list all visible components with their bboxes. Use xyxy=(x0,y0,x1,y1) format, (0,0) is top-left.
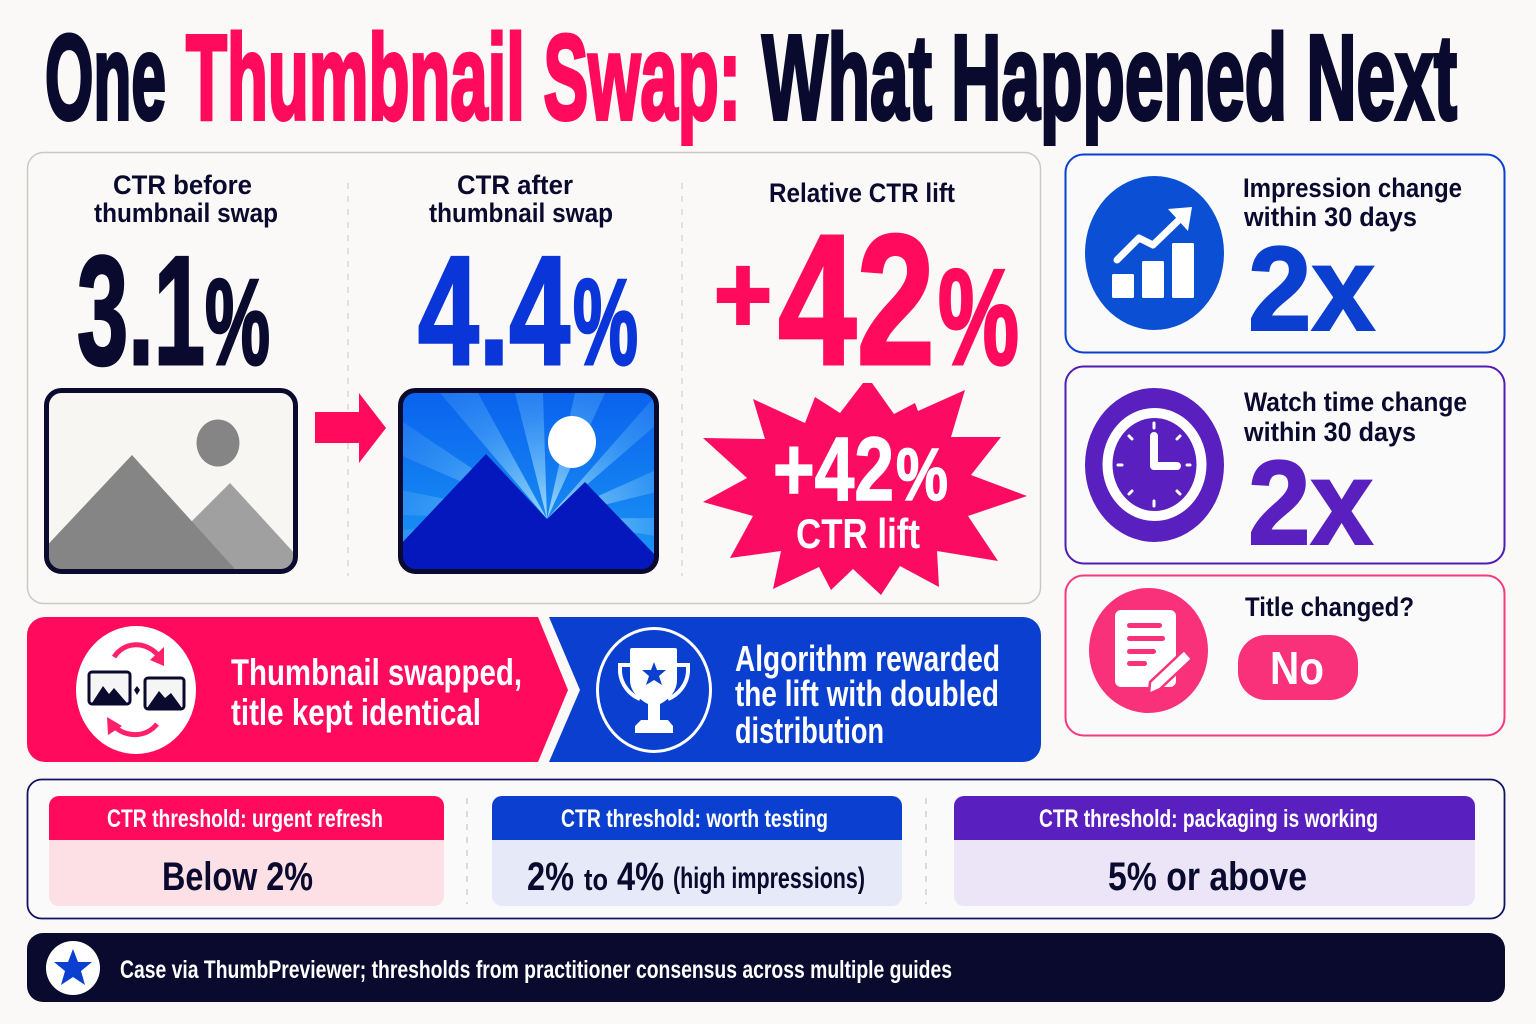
threshold: worth testing: to xyxy=(584,862,608,897)
panel: CTR thresholds xyxy=(28,780,1504,918)
heading: CTR before xyxy=(94,170,278,228)
threshold: worth testing: (high impressions) xyxy=(673,862,865,895)
icon: vivid thumbnail after xyxy=(400,390,656,572)
heading: CTR after xyxy=(429,170,613,228)
text: thumbnail swapped: Thumbnail swapped, xyxy=(231,652,522,693)
text: thumbnail swapped: title kept identical xyxy=(231,692,481,733)
icon: trophy xyxy=(598,628,710,752)
text: algorithm rewarded xyxy=(735,638,1000,751)
panel: CTR comparison xyxy=(28,152,1040,604)
stat: +42%: 42 xyxy=(778,197,935,404)
callout: +42% CTR lift starburst xyxy=(703,383,1027,595)
stat: +42% xyxy=(714,197,1019,404)
heading: CTR before: thumbnail swap xyxy=(94,198,278,228)
icon: star xyxy=(46,941,100,995)
stat: +42%: % xyxy=(938,241,1019,393)
threshold: packaging is working xyxy=(954,796,1475,906)
heading: relative CTR lift: Relative CTR lift xyxy=(769,178,955,208)
threshold: worth testing: 4% xyxy=(617,855,664,899)
banner: swap and outcome xyxy=(27,617,1041,762)
label: watch time change: within 30 days xyxy=(1243,417,1416,447)
footer: source note xyxy=(27,933,1505,1002)
label: impression change: within 30 days xyxy=(1243,202,1417,232)
heading: CTR after: CTR after xyxy=(457,170,573,200)
banner: thumbnail swapped xyxy=(27,617,568,762)
pill: No: No xyxy=(1270,642,1324,694)
title: Thumbnail Swap: xyxy=(186,9,741,145)
card: impression change xyxy=(1066,154,1504,356)
icon: document with pencil xyxy=(1089,588,1208,713)
label: watch time change xyxy=(1243,387,1467,447)
threshold: worth testing: CTR threshold: worth testing xyxy=(561,805,828,833)
icon: swap thumbnails xyxy=(76,626,196,754)
label: watch time change: Watch time change xyxy=(1244,387,1467,417)
threshold: packaging is working: 5% or above xyxy=(1108,855,1307,899)
card: watch time change xyxy=(1066,366,1504,570)
threshold: worth testing: 2% xyxy=(527,855,574,899)
callout: +42% CTR lift starburst: % xyxy=(896,433,948,516)
card: title changed xyxy=(1066,576,1504,736)
threshold: worth testing xyxy=(492,796,902,906)
banner: algorithm rewarded xyxy=(549,617,1041,762)
label: impression change: Impression change xyxy=(1243,173,1462,203)
threshold: urgent refresh: Below 2% xyxy=(162,855,313,899)
text: source: Case via ThumbPreviewer; thresholds from practitioner consensus across multiple guides xyxy=(120,956,952,984)
stat: 4.4%: % xyxy=(573,254,638,390)
text: algorithm rewarded: distribution xyxy=(735,710,884,751)
stat: 2x watch time: 2x xyxy=(1248,436,1373,570)
threshold: packaging is working: CTR threshold: packaging is working xyxy=(1039,805,1378,833)
arrow: before to after xyxy=(315,393,386,463)
pill: No xyxy=(1238,635,1358,700)
text: algorithm rewarded: Algorithm rewarded xyxy=(735,638,1000,679)
title: One xyxy=(45,9,166,145)
callout: +42% CTR lift starburst: CTR lift xyxy=(796,510,920,557)
icon: clock xyxy=(1085,388,1224,542)
icon: grey thumbnail before xyxy=(40,390,296,572)
label: impression change xyxy=(1243,173,1462,232)
stat: 2x impressions: 2x xyxy=(1248,222,1375,356)
icon: growth chart xyxy=(1085,176,1224,330)
text: algorithm rewarded: the lift with doubled xyxy=(735,673,999,714)
label: title changed: Title changed? xyxy=(1245,592,1414,622)
heading: CTR before: CTR before xyxy=(113,170,252,200)
callout: +42% CTR lift starburst: +42 xyxy=(773,420,894,520)
threshold: urgent refresh: CTR threshold: urgent refresh xyxy=(107,805,383,833)
threshold: urgent refresh xyxy=(49,796,444,906)
text: thumbnail swapped xyxy=(231,652,522,733)
stat: 3.1%: 3.1 xyxy=(77,224,205,397)
heading: CTR after: thumbnail swap xyxy=(429,198,613,228)
stat: 4.4%: 4.4 xyxy=(418,224,570,397)
stat: 3.1%: % xyxy=(205,254,270,390)
stat: +42%: + xyxy=(714,233,772,356)
